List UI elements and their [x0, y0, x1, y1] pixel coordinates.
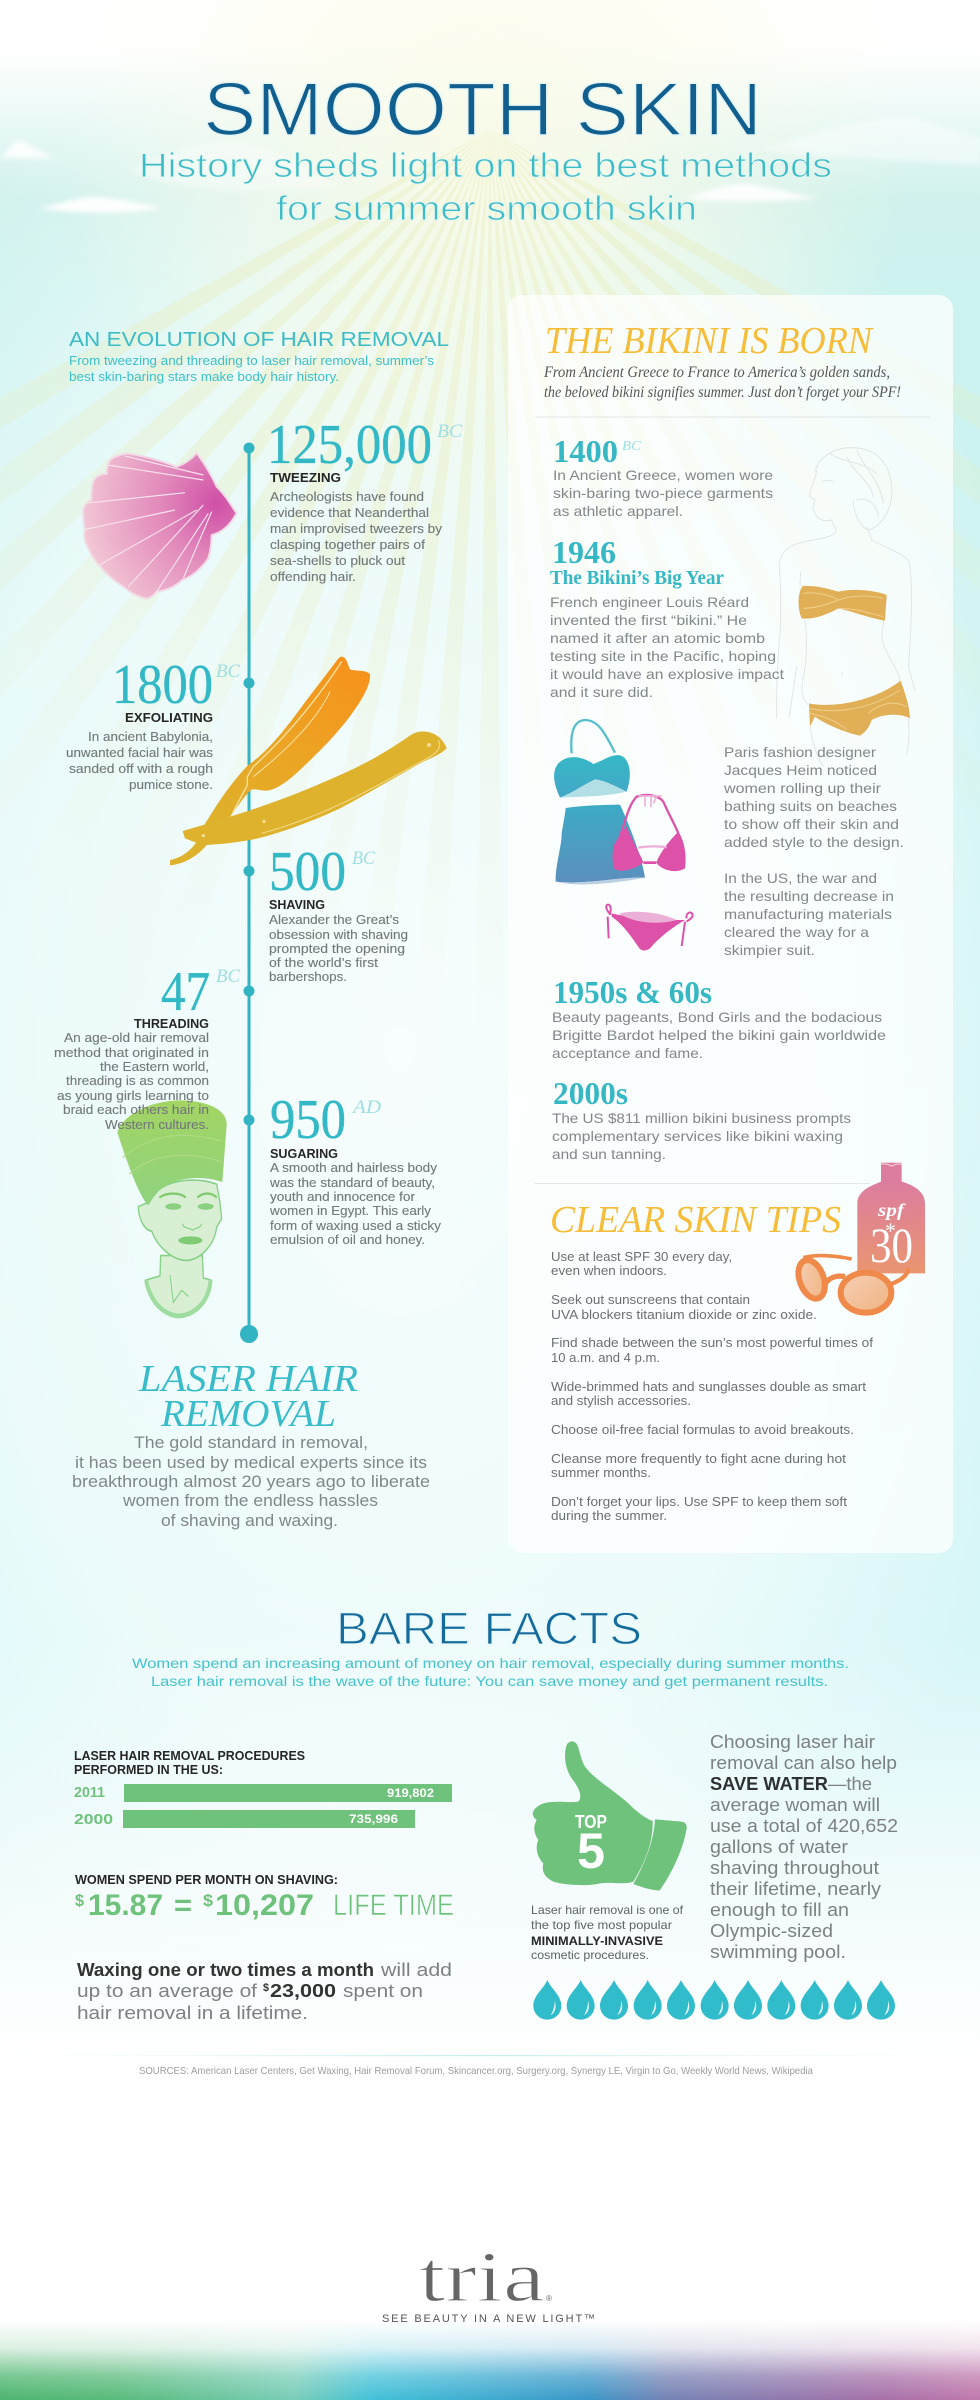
- section heading: evolution of hair removal: [69, 329, 449, 384]
- event: 950 AD sugaring: 950: [270, 1089, 346, 1151]
- stat: spend per month on shaving: LIFE TIME: [333, 1889, 454, 1922]
- icon row: water drops: [533, 1980, 895, 2020]
- laser hair removal: LASER HAIR: [138, 1358, 358, 1400]
- 1946 entry: French engineer Louis Réard: [550, 594, 749, 610]
- event: 500 BC shaving: Alexander the Great’s: [269, 913, 399, 927]
- event: 125,000 BC tweezing: TWEEZING: [270, 471, 341, 485]
- 2000s entry: and sun tanning.: [552, 1146, 666, 1162]
- icon: Nefertiti bust: [117, 1100, 227, 1316]
- bottom colour band: [0, 2320, 980, 2400]
- 1946 entry: testing site in the Pacific, hoping: [550, 648, 776, 664]
- bare facts intro: Laser hair removal is the wave of the future: You can save money and get permanent results.: [151, 1673, 828, 1689]
- 1950s and 60s entry: acceptance and fame.: [552, 1045, 703, 1061]
- heading: bare facts: BARE FACTS: [336, 1603, 642, 1654]
- laser hair removal: REMOVAL: [160, 1393, 336, 1435]
- timeline axis: [240, 442, 258, 1343]
- stat: waxing lifetime cost: hair removal in a lifetime.: [77, 2002, 308, 2023]
- icon: straight razor: [170, 657, 447, 865]
- stat: spend per month on shaving: 10,207: [215, 1889, 314, 1922]
- event: 950 AD sugaring: youth and innocence for: [270, 1190, 415, 1204]
- event: 1800 BC exfoliating: EXFOLIATING: [125, 711, 213, 725]
- save water text: use a total of 420,652: [710, 1815, 898, 1836]
- event: 125,000 BC tweezing: Archeologists have found: [270, 490, 424, 504]
- logo: tria: ®: [546, 2294, 552, 2303]
- event: 500 BC shaving: prompted the opening: [269, 942, 405, 956]
- stat: spend per month on shaving: WOMEN SPEND PER MONTH ON SHAVING:: [75, 1873, 338, 1887]
- event: 125,000 BC tweezing: BC: [437, 421, 462, 442]
- heading: the bikini is born: THE BIKINI IS BORN: [545, 320, 875, 362]
- In the US paragraph: [724, 870, 894, 958]
- event: 950 AD sugaring: women in Egypt. This early: [269, 1204, 432, 1218]
- event: 47 BC threading: BC: [216, 966, 240, 987]
- top five caption: MINIMALLY-INVASIVE: [531, 1934, 663, 1948]
- save water text: Olympic-sized: [710, 1920, 833, 1941]
- save water text: SAVE WATER: [710, 1773, 828, 1794]
- tips list: 10 a.m. and 4 p.m.: [551, 1350, 660, 1365]
- top five caption: Laser hair removal is one of: [531, 1903, 684, 1917]
- heading: the bikini is born: the beloved bikini signifies summer. Just don’t forget your SPF!: [544, 384, 901, 401]
- title: SMOOTH SKIN: [203, 67, 762, 151]
- 1946 entry: [550, 534, 784, 700]
- stat: waxing lifetime cost: $: [263, 1982, 269, 1994]
- 1946 entry: The Bikini’s Big Year: [550, 567, 724, 589]
- 2000s entry: [552, 1075, 851, 1162]
- event: 47 BC threading: THREADING: [134, 1017, 209, 1031]
- icon: thumbs up top 5: 5: [577, 1823, 605, 1879]
- logo: tria: tria: [419, 2237, 545, 2317]
- 1950s and 60s entry: Brigitte Bardot helped the bikini gain worldwide: [552, 1027, 886, 1043]
- event: 125,000 BC tweezing: evidence that Neanderthal: [270, 506, 429, 520]
- sun rays: [0, 109, 980, 1130]
- event: 125,000 BC tweezing: sea-shells to pluck out: [270, 554, 406, 568]
- tips list: Cleanse more frequently to fight acne during hot: [551, 1451, 846, 1466]
- 1400 BC entry: [553, 433, 773, 519]
- stat: spend per month on shaving: $: [203, 1891, 214, 1910]
- laser hair removal: it has been used by medical experts since its: [75, 1454, 427, 1472]
- section heading: evolution of hair removal: AN EVOLUTION OF HAIR REMOVAL: [69, 329, 449, 351]
- stat: waxing lifetime cost: 23,000: [270, 1980, 336, 2001]
- event: 1800 BC exfoliating: 1800: [112, 654, 213, 716]
- heading: clear skin tips: CLEAR SKIN TIPS: [550, 1199, 841, 1241]
- bare facts intro: [132, 1655, 849, 1689]
- 1950s and 60s entry: 1950s & 60s: [553, 974, 712, 1010]
- 1400 BC entry: as athletic apparel.: [553, 503, 683, 519]
- event: 950 AD sugaring: emulsion of oil and honey.: [270, 1233, 425, 1247]
- event: 125,000 BC tweezing: clasping together pairs of: [270, 538, 426, 552]
- save water text: their lifetime, nearly: [710, 1878, 882, 1899]
- event: 47 BC threading: [54, 961, 240, 1132]
- event: 950 AD sugaring: was the standard of beauty,: [269, 1176, 435, 1190]
- 1946 entry: named it after an atomic bomb: [550, 630, 765, 646]
- 1400 BC entry: In Ancient Greece, women wore: [553, 467, 773, 483]
- save water text: gallons of water: [710, 1836, 848, 1857]
- event: 47 BC threading: method that originated in: [54, 1046, 209, 1060]
- tips list: Find shade between the sun’s most powerful times of: [551, 1335, 873, 1350]
- In the US paragraph: cleared the way for a: [724, 924, 869, 940]
- Paris fashion paragraph: added style to the design.: [724, 834, 904, 850]
- illustration: woman in bikini: [777, 448, 915, 767]
- event: 125,000 BC tweezing: 125,000: [267, 414, 432, 476]
- Paris fashion paragraph: to show off their skin and: [724, 816, 899, 832]
- event: 500 BC shaving: BC: [352, 848, 375, 869]
- subtitle: History sheds light on the best methods: [139, 147, 832, 185]
- tips list: Seek out sunscreens that contain: [551, 1292, 750, 1307]
- subtitle: [139, 147, 832, 228]
- top five caption: cosmetic procedures.: [531, 1948, 649, 1962]
- event: 47 BC threading: braid each others hair in: [63, 1103, 209, 1117]
- bare facts intro: Women spend an increasing amount of money on hair removal, especially during summer months.: [132, 1655, 849, 1671]
- event: 950 AD sugaring: SUGARING: [270, 1147, 338, 1161]
- save water text: [710, 1731, 898, 1962]
- event: 500 BC shaving: [269, 841, 408, 984]
- icon: thumbs up top 5: [533, 1741, 687, 1891]
- event: 950 AD sugaring: form of waxing used a sticky: [270, 1219, 442, 1233]
- event: 47 BC threading: the Eastern world,: [100, 1060, 209, 1074]
- 1946 entry: invented the first “bikini.” He: [550, 612, 747, 628]
- logo: tria: SEE BEAUTY IN A NEW LIGHT™: [382, 2313, 595, 2325]
- icon: sunscreen bottle: [857, 1163, 925, 1273]
- event: 500 BC shaving: SHAVING: [269, 898, 325, 912]
- bar chart: procedures: 2000: [74, 1812, 113, 1828]
- icon: sunscreen bottle: spf: [877, 1200, 906, 1220]
- event: 1800 BC exfoliating: pumice stone.: [129, 778, 213, 792]
- subtitle: for summer smooth skin: [276, 190, 697, 228]
- icon: sunglasses: [794, 1256, 908, 1313]
- save water text: removal can also help: [710, 1752, 897, 1773]
- event: 1800 BC exfoliating: BC: [216, 661, 240, 682]
- tips list: Choose oil-free facial formulas to avoid breakouts.: [551, 1422, 854, 1437]
- stat: waxing lifetime cost: up to an average of: [77, 1980, 258, 2001]
- bar chart: procedures: LASER HAIR REMOVAL PROCEDURES: [74, 1749, 305, 1763]
- event: 1800 BC exfoliating: [66, 654, 240, 792]
- event: 500 BC shaving: barbershops.: [269, 970, 347, 984]
- 1946 entry: and it sure did.: [550, 684, 653, 700]
- 1950s and 60s entry: [552, 974, 886, 1061]
- bar chart: procedures: 919,802: [387, 1786, 434, 1800]
- save water text: swimming pool.: [710, 1941, 846, 1962]
- stat: spend per month on shaving: 15.87: [88, 1889, 163, 1922]
- tips list: summer months.: [551, 1465, 651, 1480]
- tips list: Wide-brimmed hats and sunglasses double as smart: [551, 1379, 866, 1394]
- panel: the bikini is born: [508, 295, 953, 1553]
- icon: sunscreen bottle: *: [885, 1218, 896, 1243]
- In the US paragraph: In the US, the war and: [724, 870, 877, 886]
- top five caption: the top five most popular: [531, 1918, 672, 1932]
- tips list: even when indoors.: [551, 1263, 667, 1278]
- top five caption: [531, 1903, 684, 1962]
- event: 500 BC shaving: of the world’s first: [269, 956, 379, 970]
- event: 47 BC threading: Western cultures.: [105, 1118, 209, 1132]
- Paris fashion paragraph: women rolling up their: [723, 780, 881, 796]
- section heading: evolution of hair removal: From tweezing and threading to laser hair removal, summer’s: [69, 353, 435, 368]
- logo: tria: [382, 2237, 595, 2325]
- event: 950 AD sugaring: A smooth and hairless body: [270, 1161, 438, 1175]
- icon: thumbs up top 5: TOP: [575, 1812, 607, 1832]
- save water text: Choosing laser hair: [710, 1731, 875, 1752]
- event: 1800 BC exfoliating: sanded off with a rough: [69, 762, 213, 776]
- sources: SOURCES: American Laser Centers, Get Waxing, Hair Removal Forum, Skincancer.org, Surgery.org, Synergy LE, Virgin to Go, Weekly World News, Wikipedia: [139, 2065, 813, 2077]
- In the US paragraph: manufacturing materials: [724, 906, 892, 922]
- icon: sea shell: [83, 453, 237, 599]
- stat: spend per month on shaving: =: [174, 1889, 192, 1922]
- event: 125,000 BC tweezing: man improvised tweezers by: [270, 522, 443, 536]
- tips list: during the summer.: [551, 1508, 667, 1523]
- 1400 BC entry: skin-baring two-piece garments: [553, 485, 773, 501]
- 2000s entry: 2000s: [553, 1075, 628, 1111]
- tips list: Use at least SPF 30 every day,: [551, 1249, 732, 1264]
- section heading: evolution of hair removal: best skin-baring stars make body hair history.: [69, 369, 339, 384]
- 1946 entry: it would have an explosive impact: [550, 666, 784, 682]
- Paris fashion paragraph: Jacques Heim noticed: [724, 762, 877, 778]
- event: 47 BC threading: as young girls learning to: [57, 1089, 209, 1103]
- laser hair removal: women from the endless hassles: [122, 1492, 378, 1510]
- clouds: [0, 116, 980, 212]
- stat: spend per month on shaving: [75, 1873, 454, 1922]
- bar chart: procedures: PERFORMED IN THE US:: [74, 1763, 223, 1777]
- 1946 entry: 1946: [552, 534, 616, 570]
- laser hair removal: [72, 1358, 430, 1530]
- save water text: shaving throughout: [710, 1857, 879, 1878]
- event: 1800 BC exfoliating: In ancient Babylonia,: [88, 730, 213, 744]
- bar chart: procedures: 2011: [74, 1785, 105, 1801]
- event: 47 BC threading: An age-old hair removal: [64, 1031, 209, 1045]
- save water text: enough to fill an: [710, 1899, 849, 1920]
- event: 500 BC shaving: 500: [269, 841, 346, 903]
- tips list: UVA blockers titanium dioxide or zinc oxide.: [551, 1307, 817, 1322]
- save water text: average woman will: [710, 1794, 880, 1815]
- event: 47 BC threading: 47: [161, 961, 210, 1023]
- laser hair removal: The gold standard in removal,: [134, 1434, 368, 1452]
- bar chart: procedures: [74, 1749, 452, 1828]
- stat: spend per month on shaving: $: [75, 1891, 85, 1910]
- Paris fashion paragraph: [723, 744, 904, 850]
- heading: the bikini is born: From Ancient Greece to France to America’s golden sands,: [543, 364, 890, 381]
- tips list: and stylish accessories.: [551, 1393, 691, 1408]
- Paris fashion paragraph: bathing suits on beaches: [724, 798, 897, 814]
- laser hair removal: breakthrough almost 20 years ago to liberate: [72, 1473, 430, 1491]
- stat: waxing lifetime cost: Waxing one or two times a month: [77, 1959, 374, 1980]
- stat: waxing lifetime cost: spent on: [343, 1980, 423, 2001]
- 1400 BC entry: 1400: [553, 433, 618, 469]
- Paris fashion paragraph: Paris fashion designer: [724, 744, 876, 760]
- bar chart: procedures: 735,996: [349, 1812, 398, 1826]
- 1950s and 60s entry: Beauty pageants, Bond Girls and the bodacious: [552, 1009, 882, 1025]
- tips list: [551, 1249, 873, 1523]
- illustration: swimsuits: [554, 720, 693, 950]
- In the US paragraph: the resulting decrease in: [724, 888, 894, 904]
- event: 950 AD sugaring: AD: [351, 1097, 381, 1118]
- event: 47 BC threading: threading is as common: [66, 1074, 209, 1088]
- 2000s entry: complementary services like bikini waxing: [552, 1128, 843, 1144]
- icon: sunscreen bottle: 30: [870, 1217, 913, 1273]
- event: 500 BC shaving: obsession with shaving: [269, 928, 408, 942]
- tips list: Don’t forget your lips. Use SPF to keep them soft: [551, 1494, 847, 1509]
- 1400 BC entry: BC: [622, 439, 642, 454]
- save water text: —the: [828, 1773, 872, 1794]
- event: 1800 BC exfoliating: unwanted facial hair was: [66, 746, 213, 760]
- stat: waxing lifetime cost: will add: [380, 1959, 452, 1980]
- laser hair removal: of shaving and waxing.: [161, 1512, 338, 1530]
- event: 950 AD sugaring: [269, 1089, 442, 1247]
- stat: waxing lifetime cost: [77, 1959, 452, 2023]
- heading: the bikini is born: [543, 320, 901, 401]
- event: 125,000 BC tweezing: offending hair.: [270, 570, 356, 584]
- event: 125,000 BC tweezing: [267, 414, 462, 584]
- In the US paragraph: skimpier suit.: [724, 942, 815, 958]
- 2000s entry: The US $811 million bikini business prompts: [552, 1110, 851, 1126]
